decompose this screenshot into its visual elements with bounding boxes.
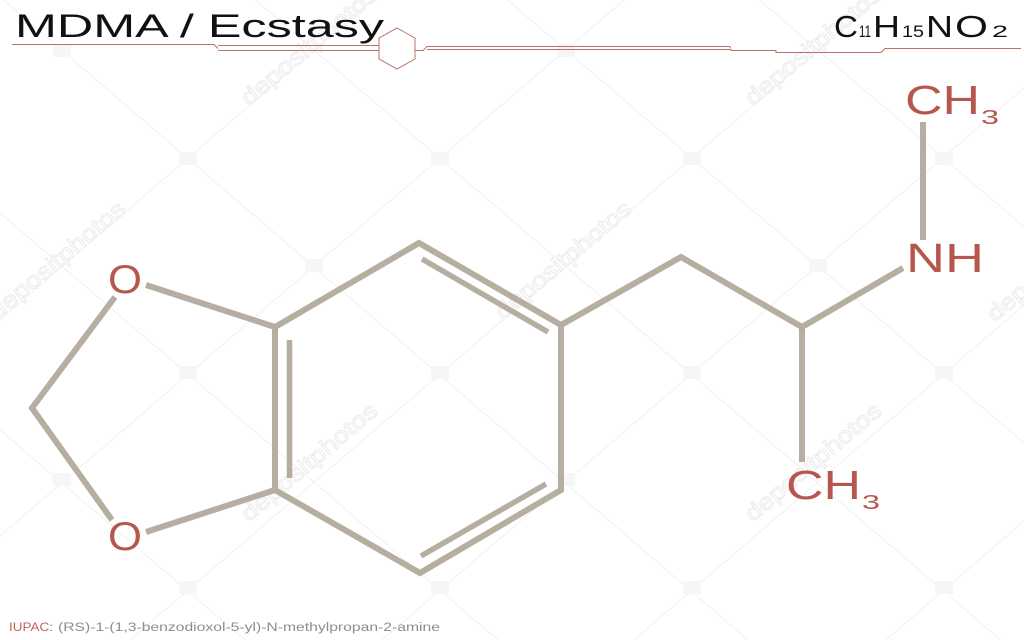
- IUPAC name: IUPAC:: [9, 622, 53, 634]
- molecular formula: 15: [902, 22, 924, 41]
- IUPAC name: (RS)-1-(1,3-benzodioxol-5-yl)-N-methylpropan-2-amine: [58, 622, 440, 634]
- inner double bonds: [290, 259, 548, 556]
- N-methyl bond: [920, 122, 926, 240]
- infographic canvas: depositphotos: [235, 0, 382, 110]
- infographic canvas: depositphotos: [739, 0, 886, 110]
- molecular formula: H: [873, 9, 900, 44]
- molecule skeleton bonds: [32, 122, 923, 573]
- label: upper CH3: CH: [905, 77, 980, 123]
- molecular formula: C: [834, 9, 858, 44]
- label: upper CH3: 3: [981, 107, 999, 129]
- label: top oxygen: O: [108, 258, 142, 302]
- icon: hexagon: [379, 28, 415, 69]
- infographic canvas: depositphotos: [489, 195, 636, 324]
- benzene ring: [275, 243, 561, 573]
- molecular formula: 2: [992, 22, 1008, 41]
- label: NH: NH: [906, 235, 984, 281]
- molecular formula: N: [926, 9, 953, 44]
- title: MDMA / Ecstasy: [15, 8, 384, 44]
- dioxole ring: [32, 285, 275, 532]
- atom labels: [108, 77, 999, 559]
- label: lower CH3: [786, 462, 880, 514]
- infographic canvas: depositphotos: [739, 397, 886, 526]
- header circuit line with hexagon: [12, 28, 1021, 69]
- infographic canvas: depositphotos: [235, 397, 382, 526]
- molecular formula: 11: [859, 22, 871, 41]
- label: upper CH3: [905, 77, 999, 129]
- label: bottom oxygen: O: [108, 515, 142, 559]
- side chain: [561, 257, 903, 462]
- molecular formula: [834, 9, 1008, 44]
- label: lower CH3: CH: [786, 462, 861, 508]
- label: lower CH3: 3: [862, 492, 880, 514]
- molecular formula: O: [955, 9, 988, 44]
- IUPAC name: [9, 622, 440, 634]
